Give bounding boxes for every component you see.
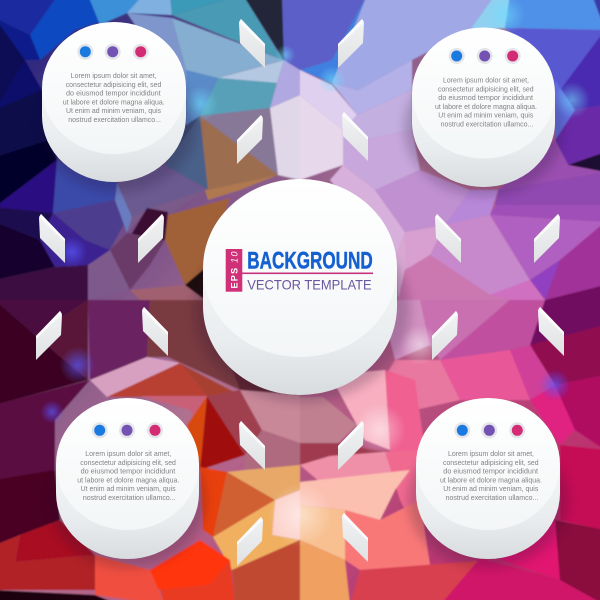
text: top-left disc [63,71,165,124]
text: bottom-right disc: ut labore et dolore magna aliqua. [440,475,542,484]
text: top-left disc: do eiusmod tempor incididunt [66,88,161,98]
disc shadows [40,56,568,568]
badge: EPS 10 [226,249,242,292]
heading underline [242,272,373,274]
text: top-left disc: ut labore et dolore magna aliqua. [63,97,165,106]
badge: EPS 10: EPS 10 [230,252,240,288]
text: bottom-left disc [77,449,179,502]
text: bottom-left disc: consectetur adipisicing elit, sed [80,458,176,467]
panel: central disc [203,179,397,395]
subheading: VECTOR TEMPLATE: VECTOR TEMPLATE [247,276,372,292]
text: bottom-right disc: consectetur adipisicing elit, sed [443,458,539,467]
text: top-right disc: Ut enim ad minim veniam, quis [438,111,534,120]
text: top-right disc: consectetur adipisicing elit, sed [438,85,534,94]
text: top-left disc: Ut enim ad minim veniam, quis [66,106,161,115]
dots: top-left disc [77,44,149,60]
text: top-left disc: consectetur adipisicing elit, sed [66,80,161,89]
heading: BACKGROUND: BACKGROUND [247,247,373,274]
panel: bottom-right disc [416,398,560,559]
text: bottom-right disc: Ut enim ad minim veniam, quis [443,484,539,493]
dots: bottom-left disc [92,422,163,438]
panel: bottom-left disc [56,398,199,559]
text: top-left disc: Lorem ipsum dolor sit amet, [71,71,157,80]
panel: top-right disc [412,28,555,187]
text: top-right disc [435,76,537,128]
text: bottom-left disc: ut labore et dolore magna aliqua. [77,475,179,484]
text: top-right disc: ut labore et dolore magna aliqua. [435,102,537,111]
text: bottom-right disc: Lorem ipsum dolor sit amet, [448,449,534,458]
text: bottom-right disc [440,449,542,502]
text: top-right disc: Lorem ipsum dolor sit amet, [443,76,529,85]
text: bottom-right disc: do eiusmod tempor incididunt [443,466,538,476]
text: bottom-left disc: nostrud exercitation ullamco... [83,493,176,502]
panel: top-left disc [42,22,186,182]
text: bottom-left disc: do eiusmod tempor incididunt [81,466,175,476]
text: bottom-right disc: nostrud exercitation ullamco... [446,493,538,502]
dots: top-right disc [449,48,521,64]
text: top-right disc: nostrud exercitation ullamco... [441,120,533,129]
text: top-right disc: do eiusmod tempor incididunt [438,93,533,102]
dots: bottom-right disc [454,422,525,438]
text: bottom-left disc: Ut enim ad minim veniam, quis [81,484,176,493]
text: top-left disc: nostrud exercitation ullamco... [68,115,161,124]
text: bottom-left disc: Lorem ipsum dolor sit amet, [85,449,171,458]
